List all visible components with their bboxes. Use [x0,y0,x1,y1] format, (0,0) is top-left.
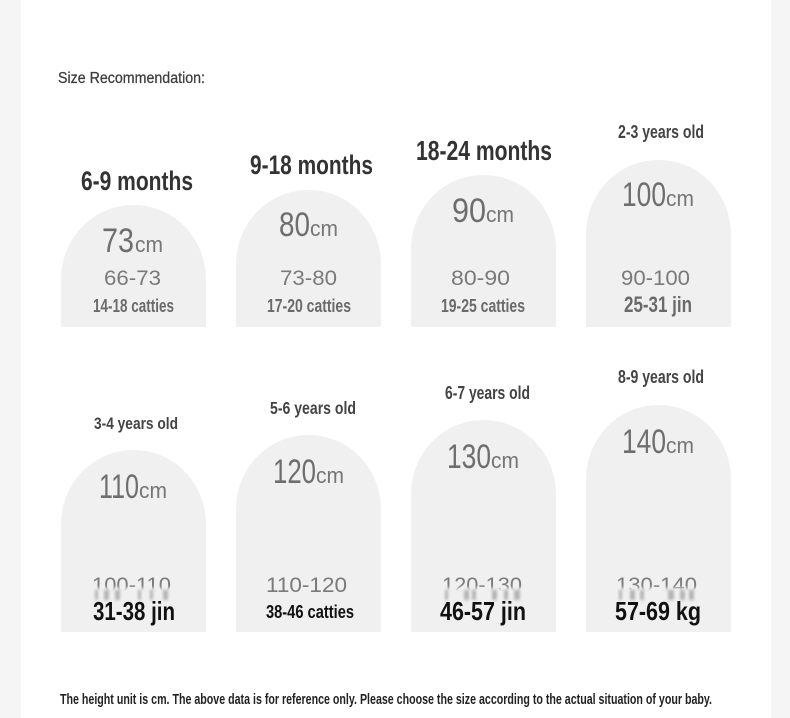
arch [411,420,556,632]
height value: 130 [447,438,491,476]
height value: cm [316,463,344,488]
text smudge [614,588,698,600]
card: 2-3 years old [586,122,731,327]
card: 18-24 months [411,135,556,327]
age label: 6-7 years old [445,383,530,403]
age label: 5-6 years old [270,398,356,418]
weight: 31-38 jin [93,596,175,626]
height value: 110 [99,468,139,506]
height value: cm [486,202,514,227]
height value: cm [666,186,694,211]
height range: 66-73 [104,267,161,290]
age label: 9-18 months [250,150,373,180]
height range: 80-90 [451,267,510,290]
card: 8-9 years old [586,367,731,632]
height value: 80 [279,206,310,244]
height value: cm [139,478,167,503]
height value: cm [666,433,694,458]
weight: 19-25 catties [441,296,525,316]
weight: 38-46 catties [266,602,354,622]
arch [61,450,206,632]
card: 3-4 years old [61,414,206,632]
height value [102,222,163,260]
height value: 73 [102,222,134,260]
text smudge [90,588,174,600]
weight: 14-18 catties [93,296,174,316]
card: 5-6 years old [236,398,381,632]
weight: 46-57 jin [440,596,526,626]
height value: cm [491,448,519,473]
height value: cm [135,232,163,257]
heading: size recommendation: Size Recommendation: [58,70,205,87]
age label: 18-24 months [416,135,552,166]
age label: 8-9 years old [618,367,704,387]
age label: 3-4 years old [94,414,178,433]
weight: 57-69 kg [615,596,701,626]
height value: cm [310,216,338,241]
height range: 110-120 [266,574,347,597]
arch [586,160,731,327]
card: 6-7 years old [411,383,556,632]
arch [236,190,381,327]
card: 9-18 months [236,150,381,327]
height value: 140 [622,423,666,461]
arch [411,175,556,327]
height range: 73-80 [280,267,337,290]
height range: 130-140 [616,574,697,597]
height value: 120 [273,453,316,491]
weight: 17-20 catties [267,296,351,316]
height range: 120-130 [442,574,522,597]
height value [279,206,338,244]
arch [586,405,731,632]
height range: 100-110 [92,574,171,597]
age label: 2-3 years old [618,122,704,142]
height range: 90-100 [621,267,690,290]
height value: 100 [622,176,666,214]
age label: 6-9 months [81,166,193,196]
weight: 25-31 jin [624,292,692,317]
arch [61,205,206,327]
height value: 90 [452,192,486,230]
card: 6-9 months [61,166,206,327]
height value [452,192,514,230]
text smudge [440,588,524,600]
arch [236,435,381,632]
